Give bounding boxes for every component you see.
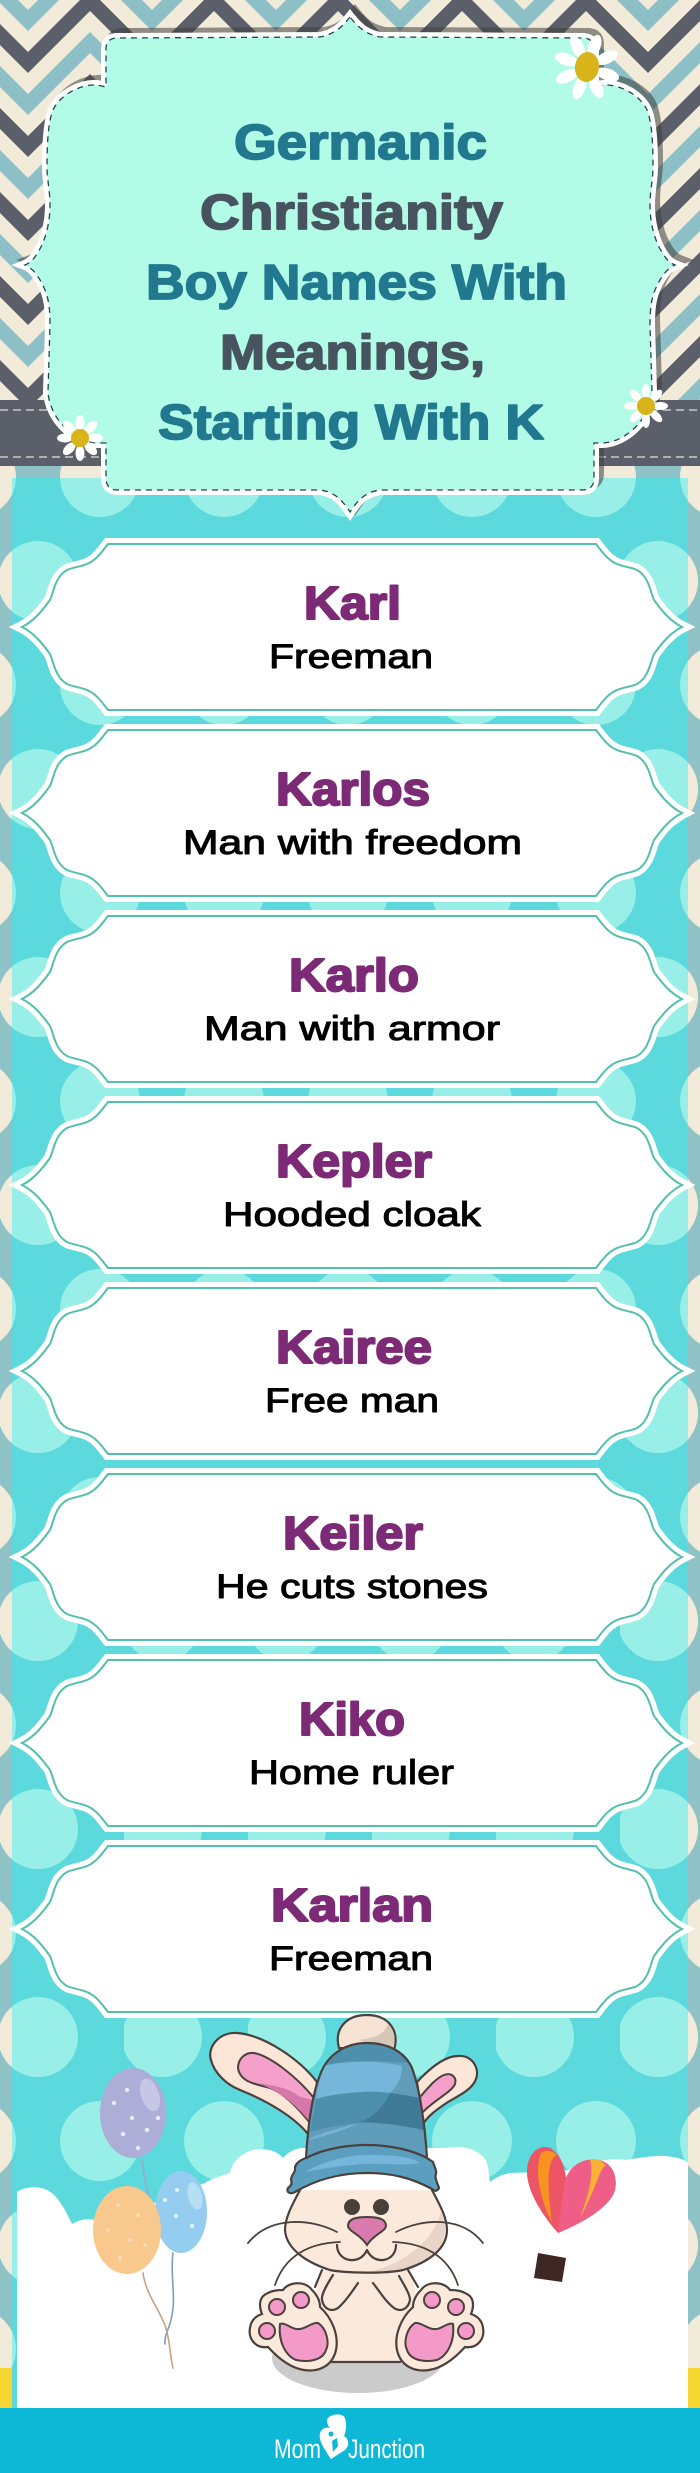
arms — [322, 2275, 410, 2310]
card: Kiko: Home ruler — [249, 1754, 454, 1792]
icon: bunny with striped hat — [210, 2015, 483, 2393]
card: Karlos: Karlos — [276, 763, 430, 815]
whiskers — [248, 2222, 483, 2285]
card: Kairee: Free man — [265, 1382, 439, 1420]
purple balloon — [100, 2068, 166, 2158]
card: Karlan: Freeman — [269, 1940, 433, 1978]
card: Karl — [22, 544, 682, 710]
side strip background with cream dots — [0, 466, 700, 2408]
right foot — [396, 2283, 483, 2370]
icon: heart balloon — [527, 2147, 616, 2282]
card: Keiler — [22, 1474, 682, 1640]
card: Karl: Freeman — [269, 638, 433, 676]
hat brim — [287, 2145, 439, 2193]
card: Karlo: Karlo — [289, 949, 419, 1001]
card: Karlan — [22, 1846, 682, 2012]
balloon basket — [534, 2253, 566, 2282]
footer logo — [274, 2414, 425, 2464]
card: Kepler: Hooded cloak — [223, 1196, 482, 1234]
footer bar — [0, 2408, 700, 2473]
footer logo: Mom — [274, 2434, 321, 2464]
icon: small right daisy — [624, 384, 668, 428]
card: Karl: Karl — [304, 577, 401, 629]
body — [315, 2270, 418, 2362]
card: Kairee — [22, 1288, 682, 1454]
card: Keiler: Keiler — [283, 1507, 423, 1559]
white clouds — [17, 2147, 688, 2408]
pom-pom — [338, 2015, 396, 2050]
right ear — [417, 2056, 477, 2124]
hat — [287, 2043, 439, 2193]
nose and mouth — [337, 2217, 396, 2260]
card: Karlo: Man with armor — [204, 1010, 500, 1048]
yellow corner accents — [0, 2368, 700, 2408]
title heading: Boy Names With — [146, 256, 567, 310]
icon: small left daisy — [57, 415, 103, 461]
card: Karlo — [22, 916, 682, 1082]
icon: large daisy — [553, 33, 621, 101]
teal polka dot panel — [12, 478, 688, 2408]
footer logo: Junction — [348, 2434, 425, 2464]
title heading: Germanic — [234, 116, 487, 170]
card: Kepler — [22, 1102, 682, 1268]
dark ribbon band — [0, 400, 700, 466]
title heading — [146, 116, 567, 450]
chevron header background — [0, 0, 700, 402]
card: Kiko — [22, 1660, 682, 1826]
left ear — [210, 2033, 317, 2134]
card: Keiler: He cuts stones — [216, 1568, 488, 1606]
card: Kiko: Kiko — [299, 1693, 405, 1745]
card: Kairee: Kairee — [276, 1321, 432, 1373]
head — [285, 2190, 447, 2273]
orange balloon — [93, 2186, 161, 2274]
title heading: Christianity — [200, 186, 503, 240]
card: Karlan: Karlan — [271, 1879, 433, 1931]
title heading: Starting With K — [158, 396, 544, 450]
title panel — [25, 12, 680, 512]
card: Karlos: Man with freedom — [183, 824, 522, 862]
title heading: Meanings, — [220, 326, 485, 380]
card: Kepler: Kepler — [276, 1135, 432, 1187]
icon: mother and child — [320, 2414, 348, 2459]
left foot — [250, 2283, 337, 2370]
eyes — [344, 2199, 389, 2215]
card: Karlos — [22, 730, 682, 896]
ground shadow — [272, 2323, 444, 2393]
icon: balloons — [93, 2068, 207, 2368]
blue balloon — [155, 2171, 207, 2253]
